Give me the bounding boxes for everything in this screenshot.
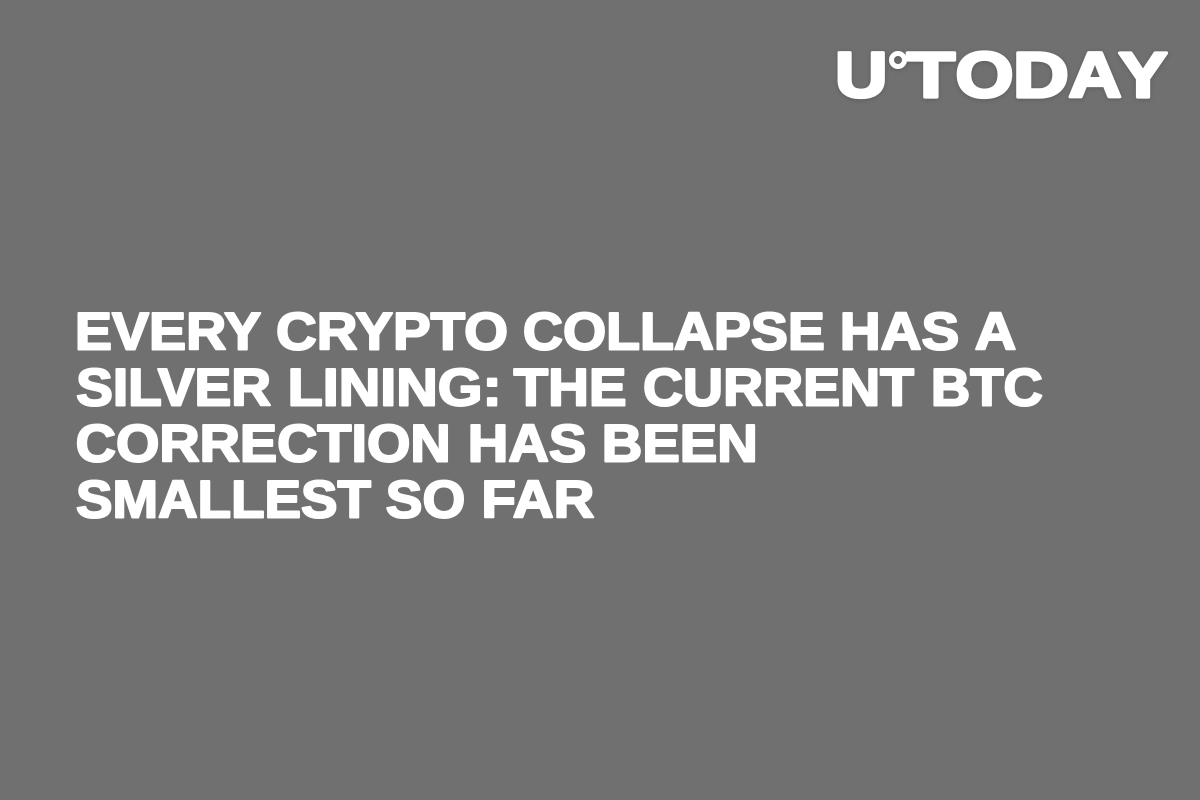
title: SMALLEST	[76, 470, 371, 530]
title: A	[975, 302, 1016, 362]
title: CURRENT	[643, 358, 914, 418]
title: HAS	[840, 302, 959, 362]
title	[75, 302, 1043, 530]
title: EVERY	[75, 302, 261, 362]
logo: U.Today: U	[835, 39, 888, 111]
logo: U.Today: T	[907, 39, 955, 111]
logo: U.Today: O	[956, 39, 1014, 111]
title: HAS	[468, 414, 586, 474]
title: LINING:	[288, 358, 502, 418]
logo: U.Today	[835, 39, 1168, 111]
logo: U.Today: Y	[1118, 39, 1168, 111]
logo: U.Today: D	[1013, 39, 1069, 111]
logo: U.Today: A	[1068, 39, 1122, 111]
title: FAR	[481, 470, 594, 530]
title: BTC	[931, 358, 1043, 418]
title: BEEN	[602, 414, 758, 474]
title: SO	[386, 470, 465, 530]
title: COLLAPSE	[523, 302, 825, 362]
title: THE	[514, 358, 627, 418]
title: SILVER	[76, 358, 271, 418]
title: CORRECTION	[76, 414, 451, 474]
title: CRYPTO	[276, 302, 508, 362]
